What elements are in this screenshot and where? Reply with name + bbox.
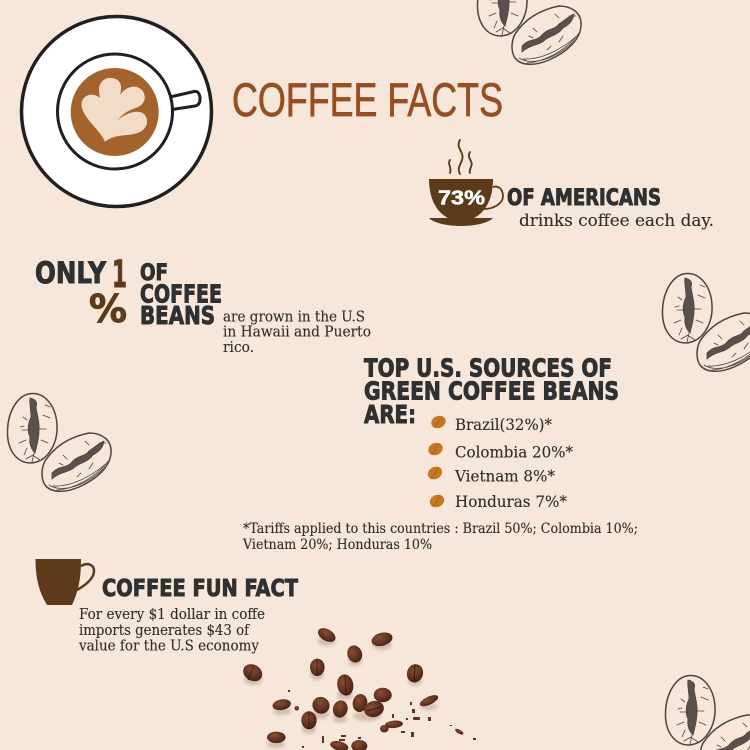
top sources bbox=[364, 354, 619, 511]
icon: steaming coffee cup bbox=[429, 140, 503, 226]
daily drinkers text: drinks coffee each day. bbox=[519, 211, 714, 230]
top sources heading bbox=[364, 354, 619, 429]
top sources heading: TOP U.S. SOURCES OF bbox=[364, 354, 612, 382]
tariffs note: *Tariffs applied to this countries : Brazil 50%; Colombia 10%; bbox=[243, 521, 638, 537]
of americans heading: OF AMERICANS bbox=[507, 186, 661, 211]
of coffee beans heading: COFFEE bbox=[140, 280, 222, 308]
icon: sketched coffee beans bottom right bbox=[665, 675, 750, 750]
73 percent figure: 73% bbox=[438, 188, 485, 210]
list: vietnam: Vietnam 8%* bbox=[454, 466, 555, 486]
1 figure: 1 bbox=[112, 253, 127, 296]
fun fact text: For every $1 dollar in coffe bbox=[79, 607, 265, 623]
only 1 percent stat bbox=[35, 253, 371, 356]
tariffs note: Vietnam 20%; Honduras 10% bbox=[242, 537, 432, 553]
fun fact text bbox=[78, 607, 265, 654]
coffee fun fact bbox=[36, 559, 298, 654]
title: COFFEE FACTS bbox=[232, 73, 503, 126]
of coffee beans heading bbox=[140, 261, 222, 330]
list: colombia bbox=[426, 440, 573, 462]
tariffs note bbox=[242, 521, 638, 553]
grown in us text: rico. bbox=[223, 340, 254, 356]
icon: sketched coffee beans right bbox=[662, 273, 750, 371]
fun fact text: value for the U.S economy bbox=[78, 638, 260, 654]
only heading: ONLY bbox=[35, 256, 107, 290]
list: vietnam bbox=[426, 464, 555, 486]
icon: latte cup top view bbox=[22, 16, 212, 206]
top sources heading: ARE: bbox=[364, 400, 416, 429]
top sources heading: GREEN COFFEE BEANS bbox=[364, 376, 619, 406]
fun fact text: imports generates $43 of bbox=[79, 623, 250, 639]
list: honduras: Honduras 7%* bbox=[455, 492, 567, 511]
of coffee beans heading: BEANS bbox=[140, 301, 215, 330]
list: colombia: Colombia 20%* bbox=[455, 442, 573, 462]
fun fact heading: COFFEE FUN FACT bbox=[102, 576, 298, 602]
icon: coffee cup bbox=[36, 559, 94, 605]
list: brazil bbox=[429, 413, 552, 434]
73 percent stat bbox=[429, 140, 714, 230]
grown in us text: are grown in the U.S bbox=[223, 310, 365, 326]
icon: sketched coffee beans top bbox=[477, 0, 581, 64]
percent sign: % bbox=[89, 287, 127, 331]
icon: sketched coffee beans left bbox=[7, 393, 111, 491]
list: brazil: Brazil(32%)* bbox=[455, 415, 552, 434]
grown in us text: in Hawaii and Puerto bbox=[223, 324, 371, 340]
scattered roasted coffee beans bbox=[240, 625, 476, 750]
grown in us text bbox=[223, 310, 371, 356]
of coffee beans heading: OF bbox=[140, 261, 168, 286]
